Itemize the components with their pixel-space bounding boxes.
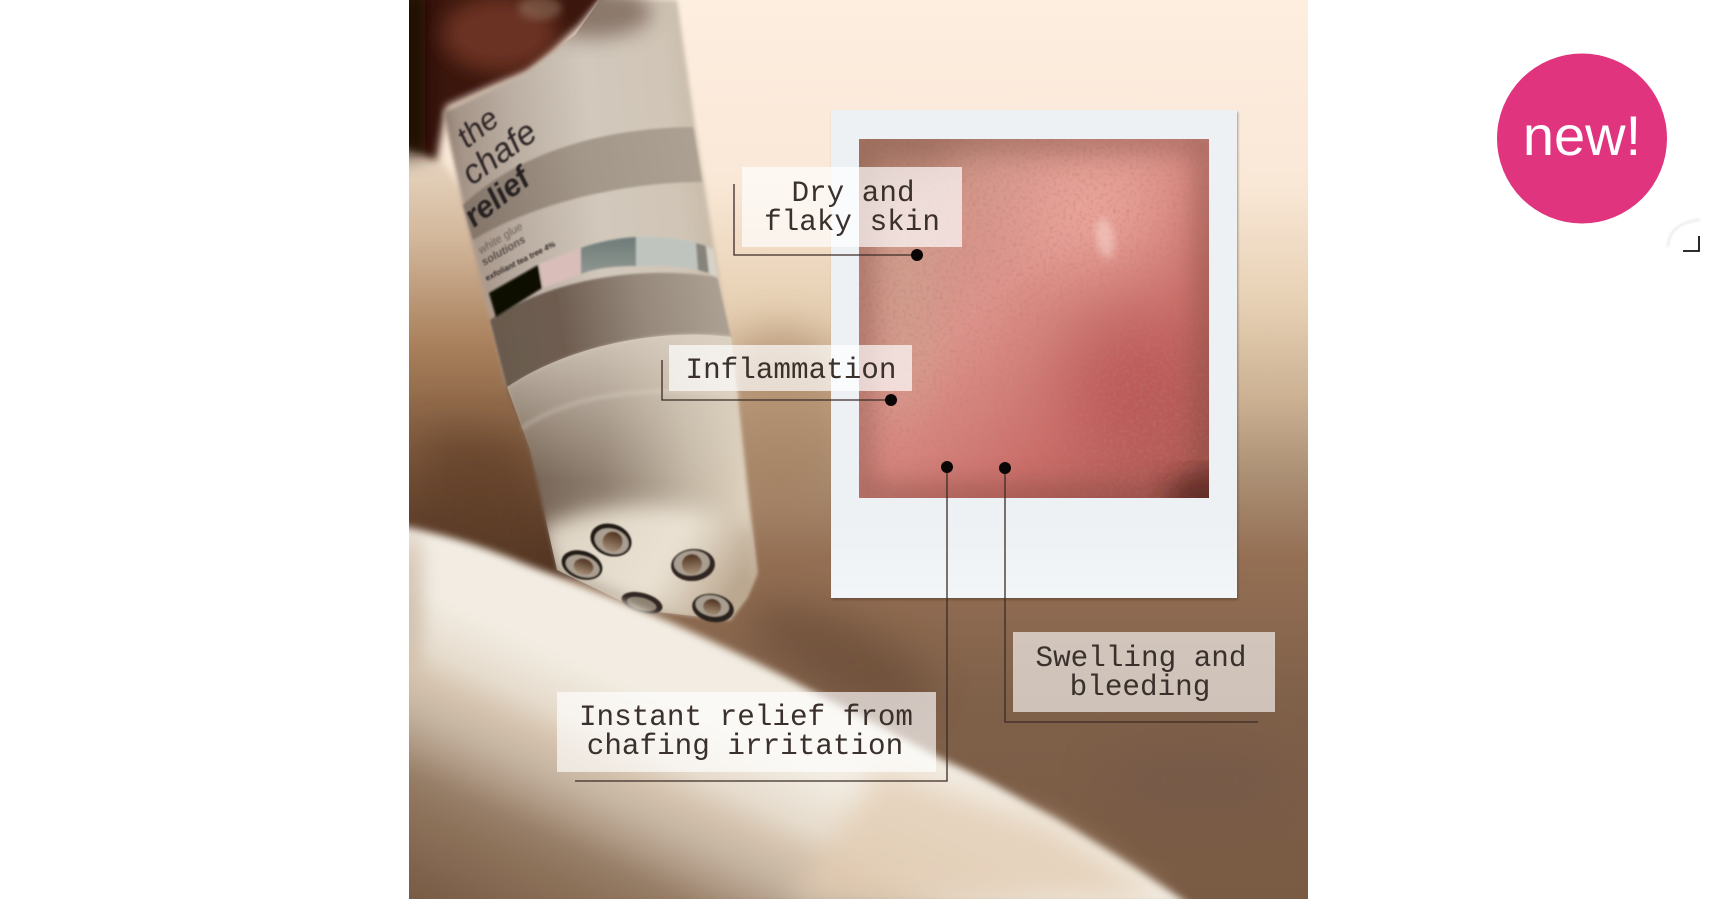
callout: inflammation: Inflammation [686,354,896,387]
nozzle [500,330,760,625]
product name on the tube: solutions [480,234,528,269]
band top [463,127,702,240]
foil stripe [489,237,718,317]
skin close-up photo [859,139,1209,498]
callout: instant relief: chafing irritation [587,730,903,763]
callout: dry and flaky skin [734,167,962,261]
hand holding the tube [395,0,610,160]
callout: dry and flaky skin: flaky skin [764,206,940,239]
band lower grey [490,273,731,388]
product name on the tube: the [450,100,505,155]
product name on the tube: chafe [454,113,544,192]
callout: dry and flaky skin: Dry and [791,177,915,210]
callout: inflammation [662,345,912,406]
photo panel: product and skin background [395,0,1308,899]
product name on the tube: exfoliant tea tree 4% [484,240,557,283]
icon: corner resize mark [1668,220,1700,251]
new badge: new! [1523,104,1641,167]
product name on the tube: white glue [476,221,525,257]
product name on the tube: relief [457,159,539,234]
new badge [1497,54,1667,224]
callout: swelling and bleeding: bleeding [1070,671,1210,704]
product name on the tube [458,112,556,282]
callout: swelling and bleeding: Swelling and [1036,642,1246,675]
product tube [443,0,760,625]
roller balls [558,518,736,625]
polaroid frame [830,110,1240,600]
foreground thigh [400,526,1190,899]
callout: swelling and bleeding [999,462,1275,722]
callout: instant relief [557,461,953,781]
left arm [400,145,580,580]
infographic canvas [409,0,1700,899]
callout: instant relief: Instant relief from [579,701,913,734]
